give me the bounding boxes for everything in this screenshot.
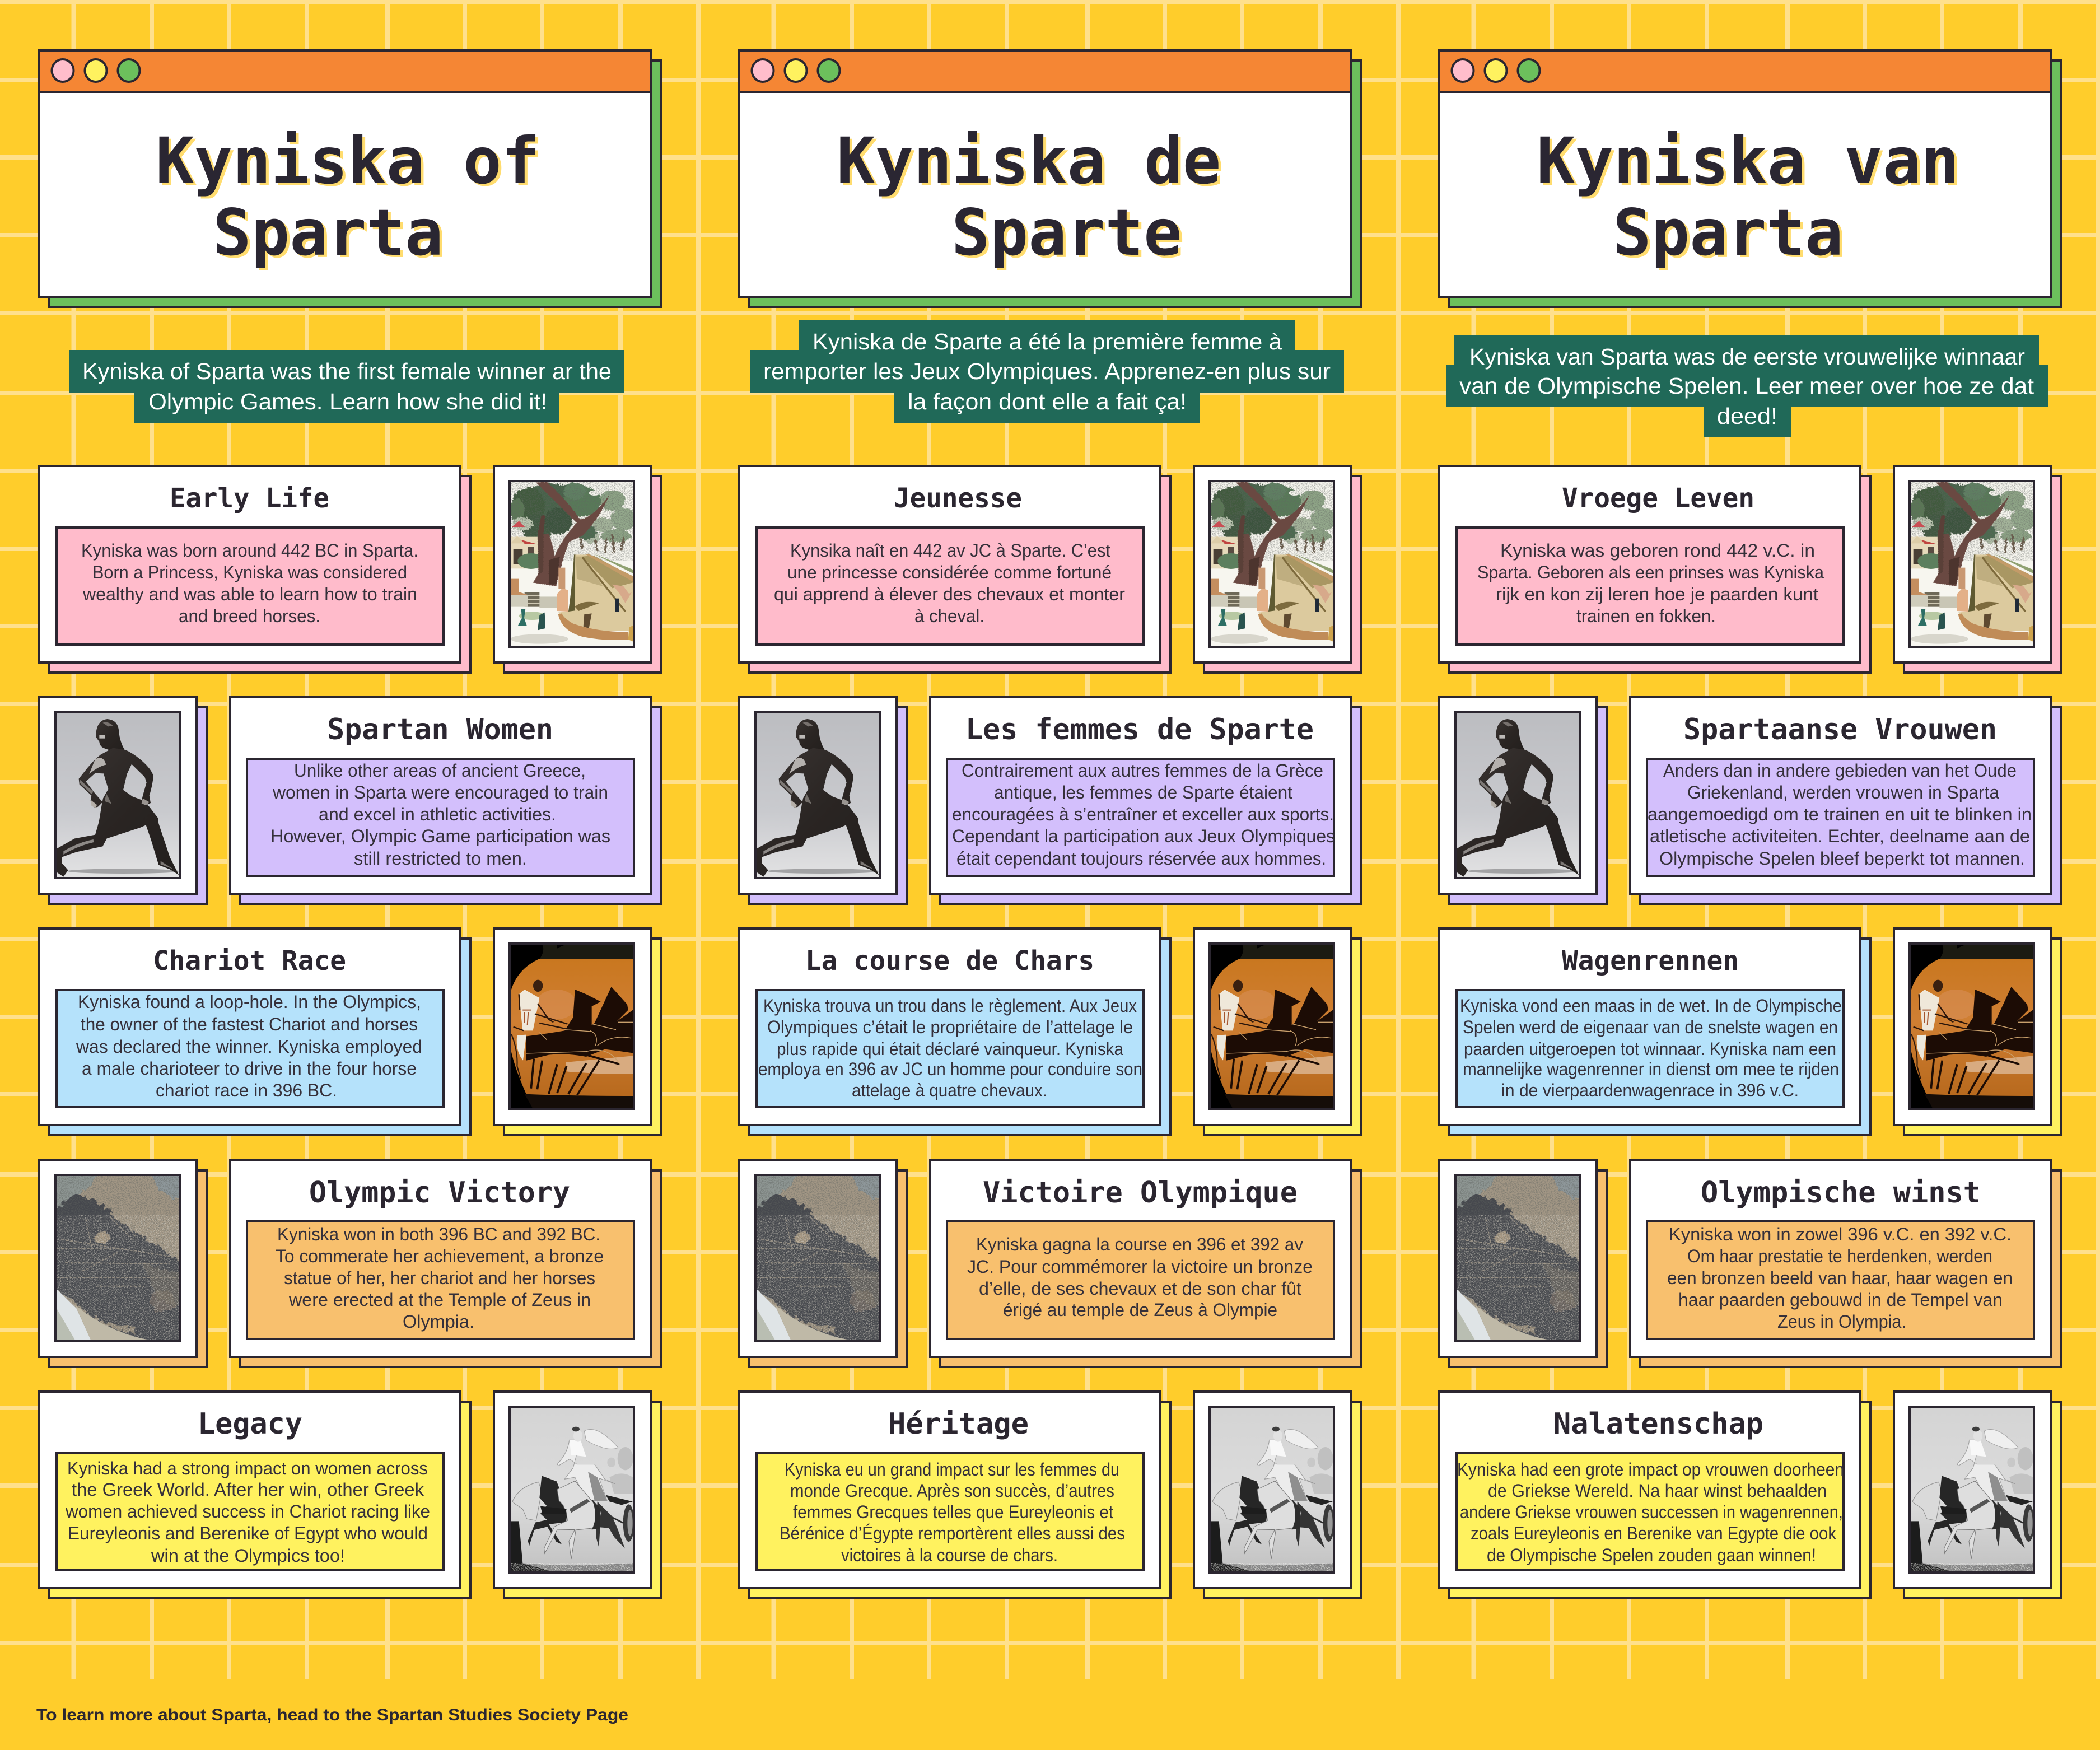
card: Héritage: victoires à la course de chars. [841, 1545, 1058, 1565]
card: Olympische winst: Kyniska won in zowel 396 v.C. en 392 v.C. [1669, 1224, 2012, 1244]
card: Olympische winst [1630, 1160, 2061, 1367]
card: Spartan Women: Unlike other areas of ancient Greece, [294, 760, 586, 781]
card: Nalatenschap [1439, 1392, 1870, 1598]
image card: inscribed stone [1439, 1160, 1607, 1367]
card: Legacy: Legacy [198, 1407, 302, 1441]
card: Wagenrennen: Spelen werd de eigenaar van de snelste wagen en [1463, 1017, 1838, 1037]
card: Olympic Victory: statue of her, her chariot and her horses [284, 1268, 595, 1288]
card: Wagenrennen: in de vierpaardenwagenrace in 396 v.C. [1501, 1080, 1799, 1100]
card: Spartaanse Vrouwen: aangemoedigd om te trainen en uit te blinken in [1648, 804, 2032, 824]
card: Early Life: Kyniska was born around 442 BC in Sparta. [81, 540, 418, 561]
card: Olympic Victory: were erected at the Temple of Zeus in [288, 1290, 591, 1310]
card: Les femmes de Sparte [930, 697, 1361, 904]
card: Victoire Olympique: Kyniska gagna la course en 396 et 392 av [976, 1234, 1303, 1254]
subtitle: Kyniska de Sparte a été la première femme à [813, 329, 1282, 354]
subtitle: Olympic Games. Learn how she did it! [148, 389, 547, 414]
card: Legacy: the Greek World. After her win, other Greek [72, 1480, 424, 1500]
card: Spartaanse Vrouwen: atletische activiteiten. Echter, deelname aan de [1650, 826, 2030, 846]
card: Early Life: wealthy and was able to learn how to train [82, 584, 417, 604]
title: Kyniska of [156, 124, 540, 198]
card: Héritage: femmes Grecques telles que Eureyleonis et [793, 1502, 1113, 1522]
card: Les femmes de Sparte: antique, les femmes de Sparte étaient [994, 782, 1292, 802]
panel: Dutch column [1439, 50, 2061, 1598]
card: La course de Chars: Kyniska trouva un trou dans le règlement. Aux Jeux [763, 996, 1137, 1016]
card: Chariot Race: a male charioteer to drive in the four horse [82, 1058, 417, 1079]
card: Héritage: monde Grecque. Après son succès, d’autres [790, 1481, 1114, 1501]
card: Early Life: Early Life [170, 483, 329, 514]
card: Victoire Olympique: JC. Pour commémorer la victoire un bronze [967, 1257, 1313, 1277]
card: Wagenrennen: Wagenrennen [1562, 945, 1739, 977]
card: Early Life: Born a Princess, Kyniska was considered [92, 562, 407, 582]
card: Vroege Leven: trainen en fokken. [1576, 606, 1716, 626]
card: Chariot Race: chariot race in 396 BC. [156, 1080, 337, 1100]
panel: English column [36, 50, 661, 1724]
card: Jeunesse: à cheval. [914, 606, 984, 626]
card: Les femmes de Sparte: Contrairement aux autres femmes de la Grèce [962, 760, 1323, 781]
card: Les femmes de Sparte: était cependant toujours réservée aux hommes. [956, 848, 1326, 869]
image card: black-figure vase with chariot [1894, 928, 2061, 1135]
card: Les femmes de Sparte: encouragées à s’entraîner et exceller aux sports. [952, 804, 1334, 824]
card: Spartaanse Vrouwen: Anders dan in andere gebieden van het Oude [1663, 760, 2017, 781]
card: Spartan Women: still restricted to men. [354, 848, 527, 869]
image card: black-figure vase with chariot [494, 928, 661, 1135]
image card: garden and running track engraving [494, 466, 661, 673]
footer note: To learn more about Sparta, head to the Spartan Studies Society Page [36, 1706, 628, 1724]
card: Vroege Leven: Sparta. Geboren als een prinses was Kyniska [1477, 562, 1824, 582]
card: Spartan Women: However, Olympic Game participation was [270, 826, 610, 846]
card: Nalatenschap: de Griekse Wereld. Na haar winst behaalden [1488, 1481, 1827, 1501]
image card: bronze running girl statue [1439, 697, 1607, 904]
title: Sparta [1613, 195, 1844, 270]
card: Olympische winst: haar paarden gebouwd in de Tempel van [1678, 1290, 2003, 1310]
subtitle [69, 350, 624, 423]
card: Héritage: Héritage [888, 1407, 1029, 1441]
card: Spartaanse Vrouwen: Olympische Spelen bleef beperkt tot mannen. [1659, 848, 2025, 869]
card: Chariot Race: was declared the winner. Kyniska employed [76, 1037, 422, 1057]
card: Olympische winst: Om haar prestatie te herdenken, werden [1687, 1246, 1992, 1266]
card: Spartan Women: and excel in athletic activities. [319, 804, 556, 824]
image card: black-figure vase with chariot [1194, 928, 1361, 1135]
title: Kyniska de [837, 124, 1221, 198]
card: Legacy: Eureyleonis and Berenike of Egypt who would [68, 1523, 428, 1543]
title: Sparte [951, 195, 1182, 270]
card: Jeunesse: qui apprend à élever des chevaux et monter [774, 584, 1125, 604]
card: Jeunesse: une princesse considérée comme fortuné [787, 562, 1112, 582]
card: Vroege Leven: Kyniska was geboren rond 442 v.C. in [1500, 540, 1815, 561]
subtitle: remporter les Jeux Olympiques. Apprenez-en plus sur [763, 358, 1331, 384]
card: Olympic Victory: Kyniska won in both 396 BC and 392 BC. [277, 1224, 600, 1244]
card: Spartan Women: Spartan Women [327, 713, 553, 746]
card: Vroege Leven [1439, 466, 1870, 673]
subtitle: Kyniska of Sparta was the first female winner ar the [82, 358, 612, 384]
title [837, 124, 1221, 270]
subtitle: la façon dont elle a fait ça! [908, 389, 1187, 414]
card: La course de Chars: employa en 396 av JC un homme pour conduire son [758, 1059, 1142, 1079]
subtitle: deed! [1717, 403, 1777, 429]
card: Victoire Olympique [930, 1160, 1361, 1367]
card: Olympische winst: Olympische winst [1701, 1176, 1981, 1210]
title window [1439, 50, 2061, 307]
card: Vroege Leven: Vroege Leven [1562, 483, 1754, 514]
card: Héritage [739, 1392, 1170, 1598]
card: Legacy: women achieved success in Chariot racing like [65, 1501, 430, 1522]
card: Nalatenschap: zoals Eureyleonis en Berenike van Egypte die ook [1471, 1523, 1837, 1543]
title [1537, 124, 1959, 270]
subtitle [1446, 335, 2048, 437]
card: Wagenrennen: paarden uitgeroepen tot winnaar. Kyniska nam een [1464, 1039, 1836, 1059]
subtitle: Kyniska van Sparta was de eerste vrouwelijke winnaar [1469, 344, 2025, 370]
card: Chariot Race [39, 928, 470, 1135]
panel: French column [739, 50, 1361, 1598]
card: Spartaanse Vrouwen [1630, 697, 2061, 904]
card: Victoire Olympique: Victoire Olympique [983, 1176, 1298, 1210]
card: Nalatenschap: Nalatenschap [1553, 1407, 1763, 1441]
card: Olympic Victory [230, 1160, 661, 1367]
card: Héritage: Kyniska eu un grand impact sur les femmes du [785, 1459, 1119, 1480]
card: La course de Chars [739, 928, 1170, 1135]
card: Jeunesse: Jeunesse [894, 483, 1022, 514]
subtitle [750, 320, 1344, 423]
card: Nalatenschap: andere Griekse vrouwen successen in wagenrennen, [1460, 1502, 1843, 1522]
card: Olympic Victory: Olympic Victory [309, 1176, 570, 1210]
card: Victoire Olympique: érigé au temple de Zeus à Olympie [1003, 1300, 1277, 1320]
card: Legacy: win at the Olympics too! [151, 1546, 345, 1566]
title window [39, 50, 661, 307]
image card: woman driving chariot engraving [1894, 1392, 2061, 1598]
card: Legacy: Kyniska had a strong impact on women across [67, 1458, 428, 1478]
card: Héritage: Bérénice d’Égypte remportèrent elles aussi des [780, 1523, 1125, 1543]
image card: inscribed stone [739, 1160, 907, 1367]
card: Olympic Victory: Olympia. [403, 1312, 474, 1332]
image card: woman driving chariot engraving [1194, 1392, 1361, 1598]
card: Les femmes de Sparte: Cependant la participation aux Jeux Olympiques [952, 826, 1335, 846]
card: Spartaanse Vrouwen: Spartaanse Vrouwen [1683, 713, 1997, 746]
image card: garden and running track engraving [1194, 466, 1361, 673]
card: Chariot Race: Kyniska found a loop-hole. In the Olympics, [78, 992, 421, 1012]
card: Victoire Olympique: d’elle, de ses chevaux et de son char fût [979, 1278, 1301, 1299]
card: Legacy [39, 1392, 470, 1598]
card: La course de Chars: Olympiques c’était le propriétaire de l’attelage le [767, 1017, 1133, 1037]
card: Chariot Race: the owner of the fastest Chariot and horses [81, 1014, 418, 1034]
card: Wagenrennen [1439, 928, 1870, 1135]
card: Spartan Women: women in Sparta were encouraged to train [272, 782, 608, 802]
card: Olympische winst: een bronzen beeld van haar, haar wagen en [1667, 1268, 2013, 1288]
subtitle: van de Olympische Spelen. Leer meer over hoe ze dat [1459, 373, 2034, 399]
card: Vroege Leven: rijk en kon zij leren hoe je paarden kunt [1496, 584, 1818, 604]
card: Spartan Women [230, 697, 661, 904]
card: Wagenrennen: Kyniska vond een maas in de wet. In de Olympische [1460, 996, 1842, 1016]
title: Sparta [213, 195, 444, 270]
image card: bronze running girl statue [39, 697, 207, 904]
card: Chariot Race: Chariot Race [153, 945, 346, 977]
card: La course de Chars: La course de Chars [805, 945, 1094, 977]
image card: bronze running girl statue [739, 697, 907, 904]
card: La course de Chars: attelage à quatre chevaux. [852, 1080, 1047, 1100]
title: Kyniska van [1537, 124, 1959, 198]
card: Early Life [39, 466, 470, 673]
image card: woman driving chariot engraving [494, 1392, 661, 1598]
image card: garden and running track engraving [1894, 466, 2061, 673]
image card: inscribed stone [39, 1160, 207, 1367]
card: Jeunesse [739, 466, 1170, 673]
card: Nalatenschap: Kyniska had een grote impact op vrouwen doorheen [1457, 1459, 1844, 1480]
card: Jeunesse: Kynsika naît en 442 av JC à Sparte. C’est [790, 540, 1110, 561]
card: La course de Chars: plus rapide qui était déclaré vainqueur. Kyniska [777, 1039, 1123, 1059]
card: Olympic Victory: To commerate her achievement, a bronze [276, 1246, 604, 1266]
card: Spartaanse Vrouwen: Griekenland, werden vrouwen in Sparta [1687, 782, 1999, 802]
title [156, 124, 540, 270]
card: Olympische winst: Zeus in Olympia. [1777, 1312, 1906, 1332]
card: Les femmes de Sparte: Les femmes de Sparte [965, 713, 1314, 746]
card: Nalatenschap: de Olympische Spelen zouden gaan winnen! [1487, 1545, 1816, 1565]
card: Wagenrennen: mannelijke wagenrenner in dienst om mee te rijden [1463, 1059, 1839, 1079]
card: Early Life: and breed horses. [179, 606, 320, 626]
title window [739, 50, 1361, 307]
